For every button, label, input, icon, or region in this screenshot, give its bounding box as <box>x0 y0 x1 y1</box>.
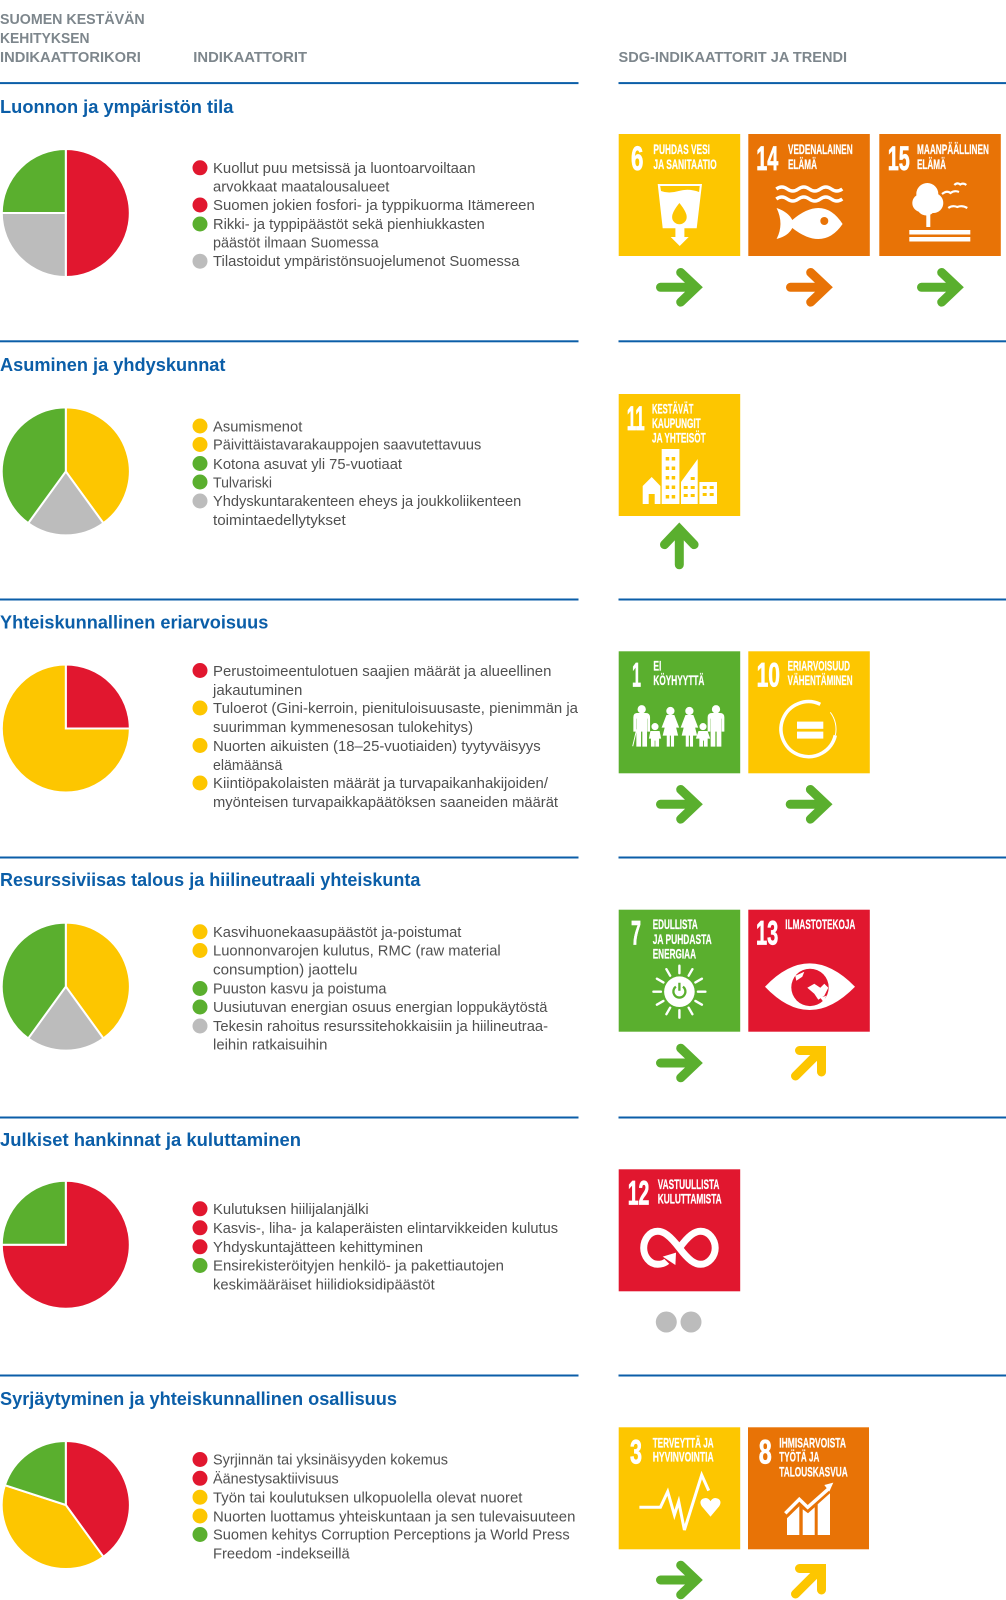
SDG tile 10: ERIARVOISUUD <box>788 657 850 673</box>
SDG tile 8: TALOUSKASVUA <box>779 1463 848 1479</box>
indicator: youth satisfaction <box>192 738 541 774</box>
indicator: youth trust: Nuorten luottamus yhteiskuntaan ja sen tulevaisuuteen <box>213 1508 575 1525</box>
trend arrow: right green <box>660 272 696 302</box>
indicator: social assistance <box>192 663 551 699</box>
trend arrow: right green <box>922 272 957 302</box>
SDG tile 12: KULUTTAMISTA <box>658 1190 722 1206</box>
pie chart <box>2 1441 130 1569</box>
heading: Resurssiviisas talous ja hiilineutraali yhteiskunta <box>0 870 421 890</box>
indicator: corruption and press freedom <box>192 1527 570 1563</box>
header: indicator basket: SUOMEN KESTÄVÄN <box>0 11 145 28</box>
indicator: refugees <box>192 775 559 811</box>
indicator: food consumption: Kasvis-, liha- ja kalaperäisten elintarvikkeiden kulutus <box>213 1220 558 1237</box>
SDG tile 15: ELÄMÄ <box>917 156 946 172</box>
indicator: environmental expenditure: Tilastoidut ympäristönsuojelumenot Suomessa <box>213 253 520 270</box>
indicator: air emissions <box>192 216 485 251</box>
panel: Resurssiviisas talous ja hiilineutraali yhteiskunta <box>0 870 870 1078</box>
indicator: air emissions: Rikki- ja typpipäästöt sekä pienhiukkasten <box>213 216 485 233</box>
heading: Yhteiskunnallinen eriarvoisuus <box>0 612 268 632</box>
indicator: renewable energy: Uusiutuvan energian osuus energian loppukäytöstä <box>213 999 548 1016</box>
SDG tile 11 <box>619 394 740 516</box>
SDG tile 1 <box>619 651 740 773</box>
indicator: urban structure <box>192 493 521 529</box>
pie chart <box>2 1181 130 1309</box>
SDG tile 12 <box>619 1169 740 1291</box>
SDG tile 14: 14 <box>756 140 778 178</box>
indicator list <box>192 663 579 811</box>
SDG tile 13 <box>748 910 870 1032</box>
SDG tile 6: JA SANITAATIO <box>653 156 717 172</box>
SDG tile 7: 7 <box>631 915 641 953</box>
SDG tile 8: IHMISARVOISTA <box>779 1434 846 1450</box>
SDG tile 14 <box>748 134 870 256</box>
indicator list <box>192 1452 575 1563</box>
SDG tile 1: 1 <box>632 656 641 694</box>
SDG tile 1: EI <box>653 658 661 674</box>
column headers <box>0 11 847 66</box>
SDG tile 15 <box>879 134 1001 256</box>
indicator: income gaps: suurimman kymmenesosan tulokehitys) <box>213 719 473 736</box>
trend arrow: right green <box>660 790 696 819</box>
panel: Luonnon ja ympäristön tila <box>0 97 1001 302</box>
indicator: discrimination: Syrjinnän tai yksinäisyyden kokemus <box>213 1452 448 1469</box>
SDG tile 13: 13 <box>756 915 778 953</box>
panel: Yhteiskunnallinen eriarvoisuus <box>0 612 870 819</box>
indicator: income gaps <box>192 700 579 736</box>
indicator: refugees: Kiintiöpakolaisten määrät ja turvapaikanhakijoiden/ <box>213 775 549 792</box>
trend arrow: right green <box>660 1048 696 1078</box>
SDG tile 10 <box>748 651 870 773</box>
SDG tile 11: KESTÄVÄT <box>652 400 694 416</box>
SDG tile 11: KAUPUNGIT <box>652 415 701 431</box>
SDG tile 3: HYVINVOINTIA <box>653 1448 714 1464</box>
SDG tile 6 <box>619 134 740 256</box>
SDG tile 8: 8 <box>759 1433 772 1471</box>
indicator: natural resources: consumption) jaottelu <box>213 962 357 979</box>
indicator: youth satisfaction: elämäänsä <box>213 757 283 774</box>
indicator: air emissions: päästöt ilmaan Suomessa <box>213 234 379 251</box>
indicator: municipal waste: Yhdyskuntajätteen kehittyminen <box>213 1239 423 1256</box>
panel: Syrjäytyminen ja yhteiskunnallinen osallisuus <box>0 1389 869 1595</box>
SDG tile 3: 3 <box>630 1433 642 1471</box>
trend arrow: right orange <box>790 272 826 302</box>
indicator: natural resources: Luonnonvarojen kulutus, RMC (raw material <box>213 943 501 960</box>
indicator: corruption and press freedom: Freedom -indekseillä <box>213 1546 350 1563</box>
SDG tile 7: ENERGIAA <box>653 945 696 961</box>
indicator: social assistance: jakautuminen <box>212 682 302 699</box>
SDG tile 6: 6 <box>631 140 643 178</box>
SDG tile 7: EDULLISTA <box>653 916 698 932</box>
indicator: dead wood: arvokkaat maatalousalueet <box>213 178 390 195</box>
SDG tile 11: 11 <box>627 400 645 438</box>
indicator: youth satisfaction: Nuorten aikuisten (18–25-vuotiaiden) tyytyväisyys <box>213 738 541 755</box>
trend arrow: right green <box>790 790 826 819</box>
indicator: urban structure: toimintaedellytykset <box>213 512 347 529</box>
header: indicator basket: KEHITYKSEN <box>0 31 90 47</box>
SDG tile 10: 10 <box>757 656 780 694</box>
indicator: flood risk: Tulvariski <box>213 474 272 491</box>
SDG tile 14: VEDENALAINEN <box>788 141 853 157</box>
heading: Syrjäytyminen ja yhteiskunnallinen osallisuus <box>0 1389 397 1409</box>
indicator: Tekes funding <box>192 1018 548 1054</box>
indicator: dead wood <box>192 160 476 195</box>
SDG tile 1: KÖYHYYTTÄ <box>653 672 704 688</box>
SDG tile 12: 12 <box>628 1174 649 1212</box>
SDG tile 14: ELÄMÄ <box>788 156 817 172</box>
indicator list <box>192 1201 558 1294</box>
indicator: nutrient load: Suomen jokien fosfori- ja typpikuorma Itämereen <box>213 197 535 214</box>
indicator: housing costs: Asumismenot <box>213 418 303 435</box>
panel: Julkiset hankinnat ja kuluttaminen <box>0 1130 740 1332</box>
panel: Asuminen ja yhdyskunnat <box>0 355 740 565</box>
indicator: greenhouse gases: Kasvihuonekaasupäästöt ja-poistumat <box>213 924 462 941</box>
indicator: vehicle emissions: keskimääräiset hiilidioksidipäästöt <box>213 1276 436 1293</box>
heading: Asuminen ja yhdyskunnat <box>0 355 226 375</box>
indicator: grocery access: Päivittäistavarakauppojen saavutettavuus <box>213 437 481 454</box>
pie chart <box>2 664 130 792</box>
SDG tile 3: TERVEYTTÄ JA <box>653 1434 714 1450</box>
SDG tile 15: 15 <box>888 140 910 178</box>
indicator: vehicle emissions <box>192 1258 504 1294</box>
header: indicator basket: INDIKAATTORIKORI <box>0 50 141 66</box>
indicator list <box>192 160 535 270</box>
heading: Luonnon ja ympäristön tila <box>0 97 234 117</box>
pie chart <box>2 149 130 277</box>
header: SDG indicators and trend: SDG-INDIKAATTORIT JA TRENDI <box>618 50 847 66</box>
SDG tile 7: JA PUHDASTA <box>653 931 712 947</box>
SDG tile 12: VASTUULLISTA <box>658 1176 719 1192</box>
SDG tile 8 <box>748 1427 869 1549</box>
pie chart <box>2 407 130 535</box>
indicator: urban structure: Yhdyskuntarakenteen eheys ja joukkoliikenteen <box>213 493 521 510</box>
indicator: social assistance: Perustoimeentulotuen saajien määrät ja alueellinen <box>213 663 551 680</box>
trend arrow: up-right yellow <box>796 1568 822 1594</box>
indicator list <box>192 418 521 529</box>
SDG tile 8: TYÖTÄ JA <box>779 1448 819 1464</box>
indicator: carbon footprint: Kulutuksen hiilijalanjälki <box>213 1201 369 1218</box>
trend arrow: up green <box>664 529 694 565</box>
trend arrow: right green <box>660 1565 696 1595</box>
SDG tile 6: PUHDAS VESI <box>653 141 710 157</box>
indicator: Tekes funding: leihin ratkaisuihin <box>213 1037 327 1054</box>
indicator: elderly at home: Kotona asuvat yli 75-vuotiaat <box>213 456 403 473</box>
indicator: income gaps: Tuloerot (Gini-kerroin, pienituloisuusaste, pienimmän ja <box>213 700 579 717</box>
pie chart <box>2 923 130 1051</box>
SDG tile 11: JA YHTEISÖT <box>652 430 706 446</box>
trend marker: no trend data <box>656 1312 702 1332</box>
SDG tile 3 <box>619 1427 740 1549</box>
SDG tile 13: ILMASTOTEKOJA <box>785 916 855 932</box>
indicator: dead wood: Kuollut puu metsissä ja luontoarvoiltaan <box>213 160 476 177</box>
SDG tile 10: VÄHENTÄMINEN <box>788 672 853 688</box>
SDG tile 7 <box>619 910 740 1032</box>
trend arrow: up-right yellow <box>796 1050 822 1076</box>
indicator: Tekes funding: Tekesin rahoitus resurssitehokkaisiin ja hiilineutraa- <box>213 1018 548 1035</box>
heading: Julkiset hankinnat ja kuluttaminen <box>0 1130 301 1150</box>
indicator: natural resources <box>192 943 501 979</box>
header: indicators: INDIKAATTORIT <box>193 50 307 66</box>
indicator: tree growth: Puuston kasvu ja poistuma <box>213 981 387 998</box>
indicator list <box>192 924 548 1054</box>
indicator: vehicle emissions: Ensirekisteröityjen henkilö- ja pakettiautojen <box>213 1258 504 1275</box>
indicator: voter turnout: Äänestysaktiivisuus <box>213 1471 339 1488</box>
indicator: refugees: myönteisen turvapaikkapäätöksen saaneiden määrät <box>213 794 559 811</box>
indicator: NEET youth: Työn tai koulutuksen ulkopuolella olevat nuoret <box>213 1489 523 1506</box>
indicator: corruption and press freedom: Suomen kehitys Corruption Perceptions ja World Press <box>213 1527 570 1544</box>
